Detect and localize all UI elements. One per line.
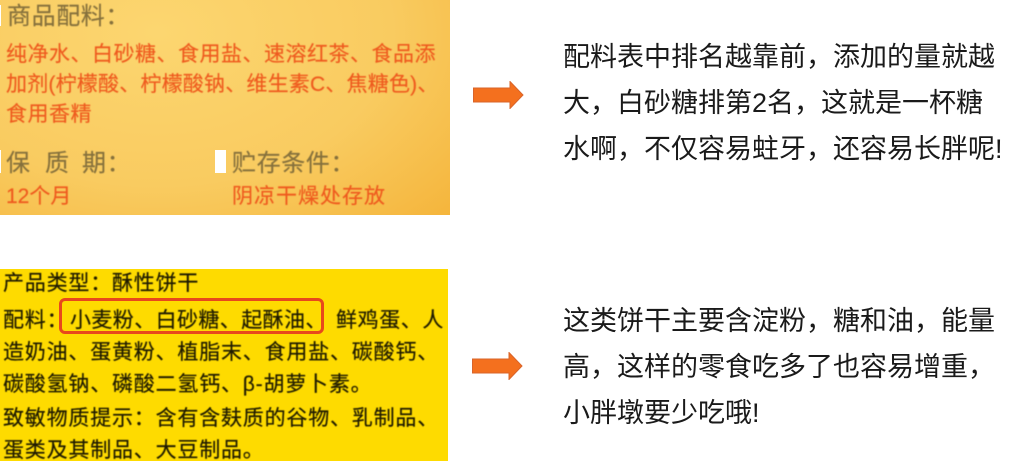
text: biscuit ingredients: 小麦粉、白砂糖、起酥油、 <box>70 309 327 332</box>
heading: shelf life: 保 <box>6 150 31 177</box>
heading: shelf life: 质 <box>45 150 70 177</box>
text: storage value: 阴凉干燥处存放 <box>232 185 386 208</box>
text: product type: 产品类型：酥性饼干 <box>3 272 199 295</box>
text: biscuit ingredients: 造奶油、蛋黄粉、植脂末、食用盐、碳酸钙、 <box>3 341 439 364</box>
text: ingredients list: 纯净水、白砂糖、食用盐、速溶红茶、食品添 <box>6 43 436 66</box>
text: bottom explanation: 这类饼干主要含淀粉，糖和油，能量 <box>563 306 995 336</box>
text: shelf life value: 12个月 <box>6 185 71 208</box>
heading: ingredients: 商品配料： <box>7 3 130 30</box>
panel: biscuit ingredient label <box>0 269 448 461</box>
heading: storage conditions: 贮存条件： <box>232 150 355 177</box>
heading: shelf life <box>6 150 131 177</box>
marker: white block <box>215 150 226 173</box>
text: biscuit ingredients: 碳酸氢钠、磷酸二氢钙、β-胡萝卜素。 <box>3 373 372 396</box>
text: bottom explanation <box>563 306 995 428</box>
arrow: bottom <box>472 352 523 380</box>
callout: red highlight box <box>59 298 324 334</box>
arrow: top <box>473 81 524 109</box>
text: allergen notice <box>3 406 439 461</box>
text: biscuit ingredients: 鲜鸡蛋、人 <box>336 309 444 332</box>
text: biscuit ingredients <box>2 308 444 396</box>
heading: shelf life: 期： <box>82 150 131 177</box>
text: top explanation <box>563 42 1003 164</box>
text: top explanation: 大，白砂糖排第2名，这就是一杯糖 <box>563 88 983 118</box>
text: top explanation: 水啊，不仅容易蛀牙，还容易长胖呢! <box>563 134 1003 164</box>
panel: tea drink ingredient label <box>0 0 450 215</box>
text: ingredients list: 加剂(柠檬酸、柠檬酸钠、维生素C、焦糖色)、 <box>6 73 439 96</box>
text: biscuit ingredients: 配料： <box>3 309 68 332</box>
text: bottom explanation: 高，这样的零食吃多了也容易增重， <box>563 352 995 382</box>
text: ingredients list <box>6 42 439 126</box>
text: top explanation: 配料表中排名越靠前，添加的量就越 <box>563 42 995 72</box>
text: ingredients list: 食用香精 <box>6 103 92 126</box>
text: bottom explanation: 小胖墩要少吃哦! <box>563 398 760 428</box>
text: allergen notice: 致敏物质提示：含有含麸质的谷物、乳制品、 <box>3 407 439 430</box>
